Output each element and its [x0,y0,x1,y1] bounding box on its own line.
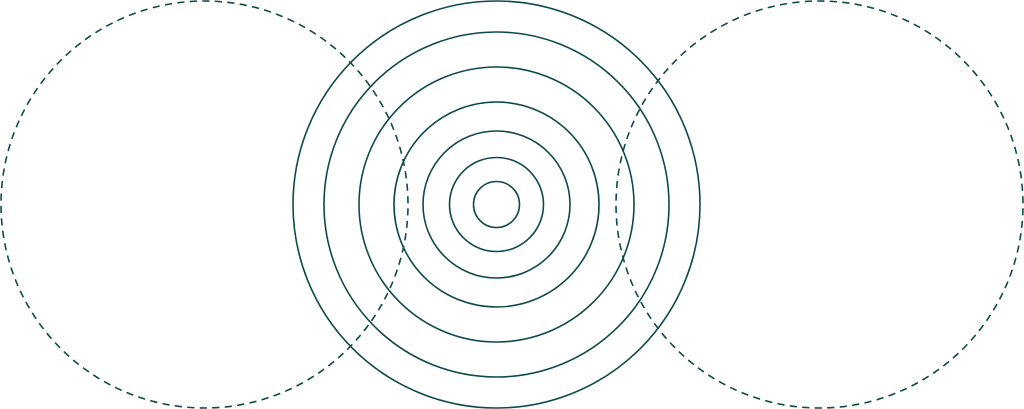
left dashed circle [1,1,408,408]
right dashed circle [616,1,1023,408]
concentric rings [293,1,700,408]
